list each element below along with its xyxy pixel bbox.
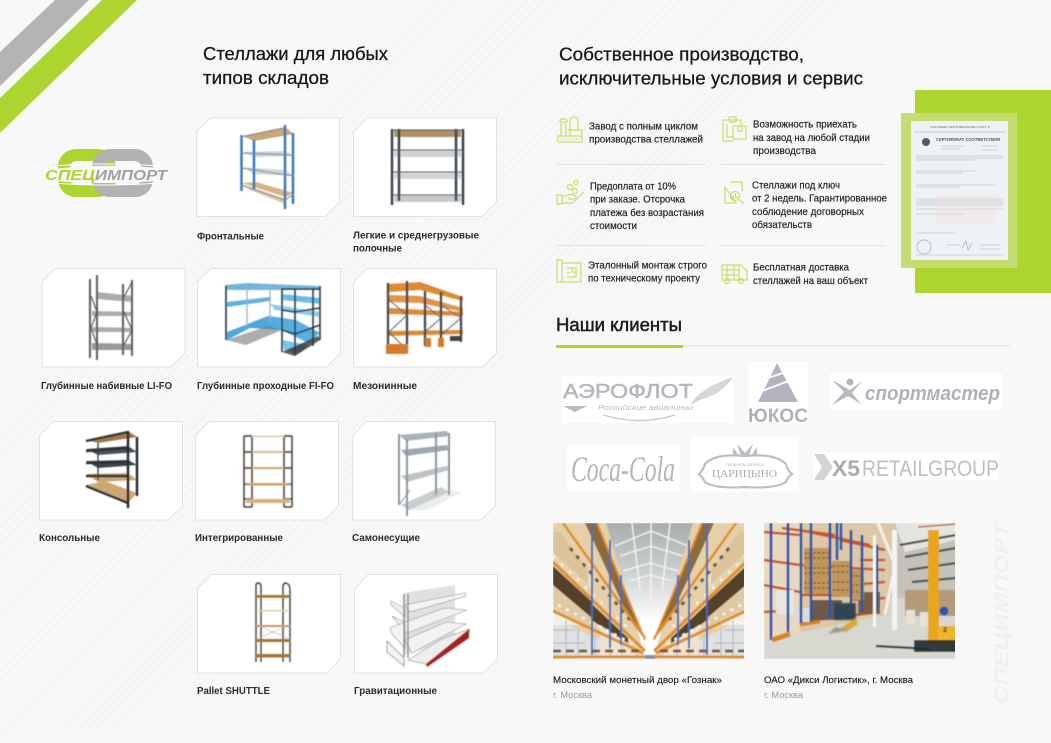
feature: prepayment: при заказе. Отсрочка: [590, 194, 685, 206]
feature: visit the factory: [723, 117, 870, 157]
caption: Dixy: [764, 675, 914, 700]
company logo: СПЕЦ: [45, 168, 96, 184]
logo: X5 Retail Group: RETAILGROUP: [862, 456, 999, 481]
vertical brand watermark: СПЕЦИМПОРТ: [992, 521, 1013, 704]
logo: Aeroflot: Российские авиалинии: [598, 403, 694, 412]
card: Pallet SHUTTLE rack: [197, 574, 340, 697]
feature: delivery: стеллажей на ваш объект: [753, 275, 868, 287]
logo: X5 Retail Group: [813, 453, 999, 481]
company logo: [44, 155, 168, 191]
card: frontal rack: Фронтальные: [197, 232, 264, 242]
card: mezzanine rack: [353, 268, 496, 392]
feature: factory: [558, 117, 703, 146]
feature: installation: [557, 260, 707, 284]
logo: Aeroflot: [562, 376, 733, 423]
logo: Tsaritsyno: [691, 437, 799, 492]
card: FI-FO rack: Глубинные проходные FI-FO: [197, 380, 334, 392]
feature: turnkey: [725, 180, 887, 231]
logo: Tsaritsyno: ПРОДУКТЫ ИЗ МЯСА: [726, 463, 765, 467]
photo: warehouse Goznak: [553, 523, 746, 659]
certificate: СЕРТИФИКАТ СООТВЕТСТВИЯ: [936, 137, 1000, 142]
card: light and medium rack: Легкие и среднегрузовые: [353, 230, 479, 242]
heading: racks: [203, 44, 388, 88]
feature: factory: производства стеллажей: [589, 134, 703, 146]
feature: turnkey: Стеллажи под ключ: [752, 180, 840, 192]
logo: Coca-Cola: Coca-Cola: [571, 449, 675, 489]
feature: prepayment: Предоплата от 10%: [590, 182, 676, 192]
caption: Goznak: [553, 675, 722, 700]
card: FI-FO rack: [197, 268, 340, 392]
card: gravity rack: Гравитационные: [354, 686, 437, 697]
feature: turnkey: от 2 недель. Гарантированное: [752, 194, 887, 204]
feature: installation: по техническому проекту: [588, 274, 701, 284]
card: console rack: [39, 422, 182, 544]
client logos: [562, 362, 1002, 492]
heading: production: [559, 44, 863, 88]
heading: clients: [556, 315, 1010, 348]
logo: Yukos: [748, 362, 808, 427]
certificate: [901, 90, 1051, 293]
logo: Sportmaster: [830, 373, 1002, 410]
heading: racks: типов складов: [203, 68, 329, 88]
heading: production: Собственное производство,: [559, 44, 804, 64]
caption: Goznak: г. Москва: [553, 690, 592, 700]
feature: prepayment: платежа без возрастания: [590, 207, 704, 219]
caption: Goznak: Московский монетный двор «Гознак»: [553, 675, 722, 686]
logo: X5 Retail Group: X5: [832, 456, 860, 481]
feature: installation: Эталонный монтаж строго: [588, 260, 707, 272]
card: LI-FO rack: Глубинные набивные LI-FO: [41, 380, 172, 392]
company logo: ИМПОРТ: [95, 168, 168, 184]
heading: production: исключительные условия и сервис: [559, 68, 863, 88]
card: mezzanine rack: Мезонинные: [353, 381, 417, 392]
caption: Dixy: ОАО «Дикси Логистик», г. Москва: [764, 675, 914, 686]
card: gravity rack: [354, 574, 498, 697]
heading: clients: Наши клиенты: [556, 315, 682, 335]
card: console rack: Консольные: [39, 533, 100, 544]
heading: racks: Стеллажи для любых: [203, 44, 388, 64]
feature: prepayment: стоимости: [590, 221, 637, 232]
card: integrated rack: [195, 422, 338, 544]
card: integrated rack: Интегрированные: [195, 533, 283, 544]
logo: Sportmaster: спортмастер: [865, 383, 1000, 405]
card: self-supporting rack: [352, 422, 496, 544]
feature: visit the factory: на завод на любой стадии: [753, 132, 870, 144]
card: frontal rack: [196, 118, 340, 242]
card: light and medium rack: полочные: [353, 244, 402, 254]
card: LI-FO rack: [41, 268, 185, 392]
logo: Aeroflot: АЭРОФЛОТ: [563, 381, 693, 403]
feature: visit the factory: Возможность приехать: [753, 120, 857, 130]
feature: delivery: Бесплатная доставка: [753, 262, 849, 274]
logo: Coca-Cola: [567, 445, 680, 491]
feature: delivery: [722, 262, 868, 287]
feature: turnkey: соблюдение договорных: [752, 206, 865, 218]
feature: turnkey: обязательств: [752, 219, 812, 231]
logo: Yukos: ЮКОС: [748, 406, 808, 427]
feature: factory: Завод с полным циклом: [589, 122, 698, 132]
feature: prepayment: [557, 180, 704, 232]
logo: Tsaritsyno: ЦАРИЦЫНО: [712, 468, 777, 480]
photo: warehouse Dixy Logistics: 2: [943, 627, 947, 634]
features list: [556, 117, 887, 287]
photo: warehouse Dixy Logistics: [764, 523, 956, 659]
feature: visit the factory: производства: [753, 146, 816, 157]
card: Pallet SHUTTLE rack: Pallet SHUTTLE: [197, 686, 270, 697]
certificate: СИСТЕМА СЕРТИФИКАЦИИ ГОСТ Р: [930, 125, 990, 129]
corner stripes: [0, 0, 137, 133]
card: self-supporting rack: Самонесущие: [352, 533, 420, 544]
caption: Dixy: г. Москва: [764, 690, 803, 700]
card: light and medium rack: [353, 118, 496, 254]
